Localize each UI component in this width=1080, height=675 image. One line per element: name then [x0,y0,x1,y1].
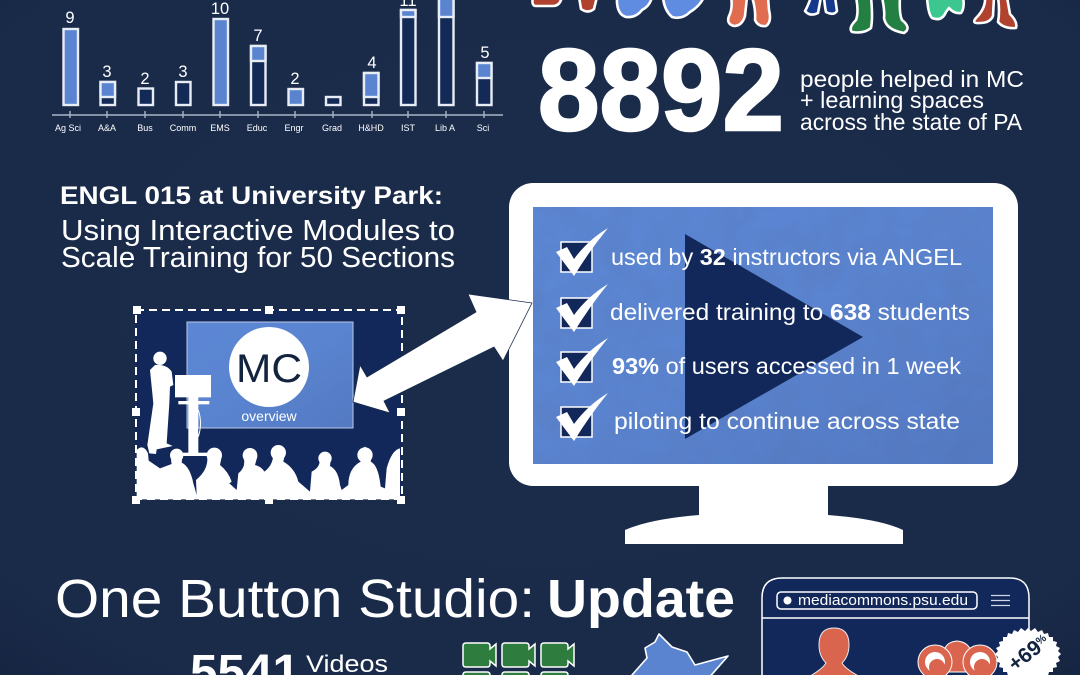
check 2 [556,284,608,332]
bar: Educ [251,46,266,105]
icons: video cameras [463,643,574,675]
badge: +69% [995,628,1061,675]
bar chart: consultations by college [52,0,503,133]
stat: 5541 videos [190,646,388,675]
heading: ENGL 015 [60,182,455,274]
check 1 [556,228,608,276]
axis labels: Educ [247,123,268,133]
bar: IST [401,10,416,105]
bar values: 7 [253,27,263,45]
double-headed arrow [353,294,532,413]
presenter silhouette [147,352,211,456]
bar: Engr [288,89,303,105]
item 4: piloting to continue across state [614,408,960,434]
axis labels: Comm [170,123,196,133]
figure: mint legs [927,0,964,19]
badge: +69%: % [1034,632,1049,648]
browser window [762,578,1061,675]
bar values: 3 [178,63,188,81]
heading: ENGL 015: Scale Training for 50 Sections [61,242,455,274]
stat description: + learning spaces [800,87,984,113]
monitor screen [533,207,993,464]
axis labels: IST [401,123,415,133]
browser header line [762,617,1029,619]
bar: A&A [100,82,115,105]
monitor [509,183,1018,544]
big stat: 8892: 8892 [538,25,784,155]
bar values: 2 [140,70,150,88]
heading: One Button Studio: Update [547,569,735,629]
icon: binoculars [918,641,997,675]
bar: Lib A [439,0,454,105]
slide screen with MC logo [187,322,353,428]
axis labels: Lib A [435,123,455,133]
heading: ENGL 015: Using Interactive Modules to [61,215,455,247]
axis labels: Grad [322,123,342,133]
monitor frame [509,183,1018,486]
cropped figures' legs at top [532,0,1016,33]
axis labels: Ag Sci [55,123,81,133]
icon: person [803,628,866,675]
stat description: people helped in MC [800,66,1024,92]
heading: One Button Studio: One Button Studio: [55,569,535,629]
figure: brown legs [974,0,1016,28]
item 1: used by 32 instructors via ANGEL [611,244,962,270]
map of region [630,634,728,675]
bar values [65,0,490,88]
bar: Sci [477,63,492,105]
bar values: 4 [367,54,377,72]
figure: orange legs [728,0,770,26]
heading: One Button Studio [55,569,735,629]
bar values: 2 [290,70,300,88]
bar: H&HD [364,73,378,105]
heading: ENGL 015: ENGL 015 at University Park: [60,182,443,210]
figure: dark blue feet [805,0,837,15]
slide screen with MC logo: overview [241,408,298,424]
selection handles [132,306,405,504]
item 2: delivered training to 638 students [610,299,970,325]
bar: Bus [138,88,153,105]
axis labels: A&A [98,123,116,133]
selection box [136,310,402,499]
bar: EMS [214,19,228,105]
bar values: 10 [211,0,229,18]
monitor stand [625,480,903,544]
stat description [800,66,1024,135]
check 4 [556,393,608,441]
bar values: 9 [65,9,75,27]
axis labels: H&HD [358,123,384,133]
figure: blue wheelchair [617,0,704,18]
bar values: 5 [480,44,490,62]
slide screen with MC logo: MC [236,347,302,391]
axis labels: Engr [284,123,304,133]
play triangle [685,234,863,439]
figure: red feet [532,0,597,12]
axis labels [55,123,489,133]
axis labels: Bus [137,123,153,133]
bar values: 3 [102,63,112,81]
axis labels: EMS [210,123,230,133]
figure: green legs [851,0,908,33]
bar: Grad [326,97,340,105]
check 3 [556,338,608,386]
hamburger menu [991,596,1010,606]
browser frame [762,578,1029,675]
url bar: mediacommons.psu.edu [798,592,968,609]
bar: Ag Sci [64,29,78,105]
stat description: across the state of PA [800,109,1023,135]
presenter panel [132,306,405,504]
badge: +69%: +69 [1004,636,1046,675]
axis labels: Sci [477,123,489,133]
bar: Comm [176,82,190,105]
chart axis [52,111,503,118]
item 3: 93% of users accessed in 1 week [612,353,961,379]
audience silhouettes [137,445,400,499]
checklist [556,228,970,441]
